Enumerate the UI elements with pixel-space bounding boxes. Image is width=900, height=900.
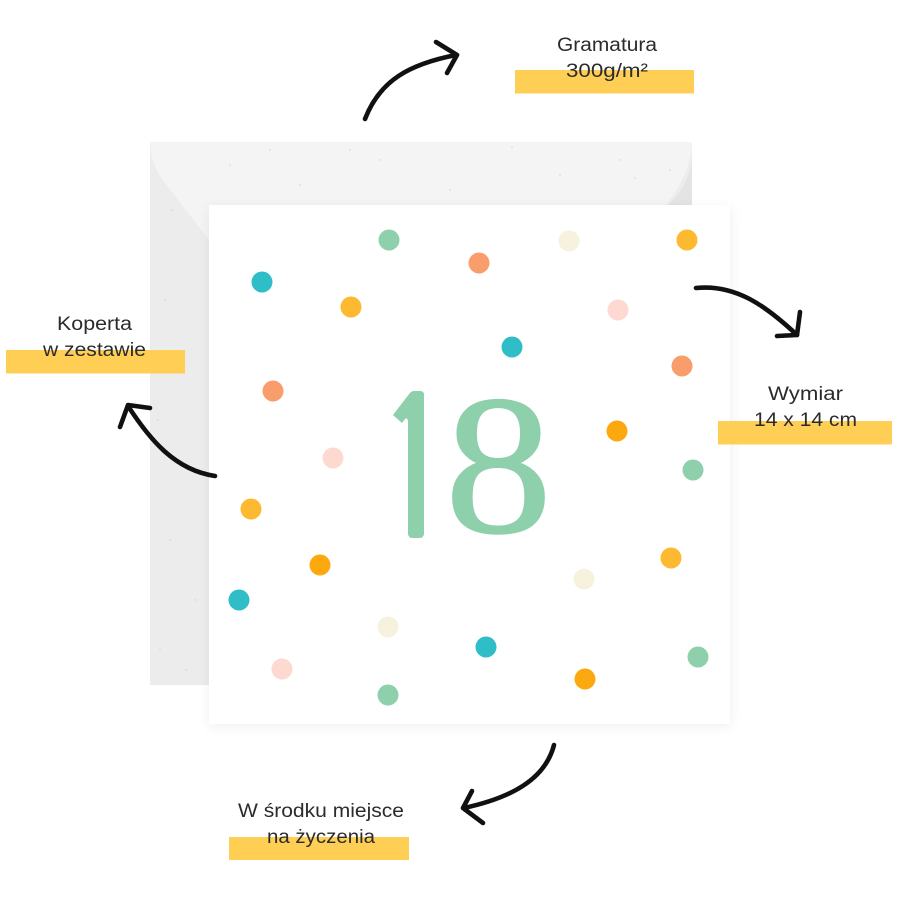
arrow: to Koperta [120, 405, 215, 476]
label: Gramatura: Gramatura [557, 35, 657, 56]
envelope [150, 142, 692, 685]
label: Koperta w zestawie [6, 314, 185, 374]
label: Wymiar: 14 x 14 cm [754, 410, 857, 431]
label: W srodku miejsce na zyczenia: na życzenia [267, 827, 375, 848]
label: Wymiar: Wymiar [768, 384, 844, 405]
arrow: to W srodku [463, 745, 554, 823]
label: W srodku miejsce na zyczenia [229, 801, 409, 860]
big number 18: 1 [354, 346, 472, 584]
label: W srodku miejsce na zyczenia: W środku miejsce [238, 801, 404, 822]
big number 18 [393, 391, 545, 538]
big number 18: 8 [445, 354, 552, 575]
card shadow [209, 207, 731, 727]
confetti dots [228, 230, 708, 706]
envelope flap [150, 142, 692, 240]
label: Gramatura [515, 35, 694, 94]
label: Wymiar [718, 384, 892, 444]
arrow: to Gramatura [365, 42, 457, 119]
label: Koperta w zestawie: Koperta [57, 314, 132, 335]
label: Gramatura: 300g/m² [566, 61, 648, 82]
card [209, 205, 730, 724]
label: Koperta w zestawie: w zestawie [42, 340, 146, 361]
arrow: to Wymiar [696, 288, 800, 336]
